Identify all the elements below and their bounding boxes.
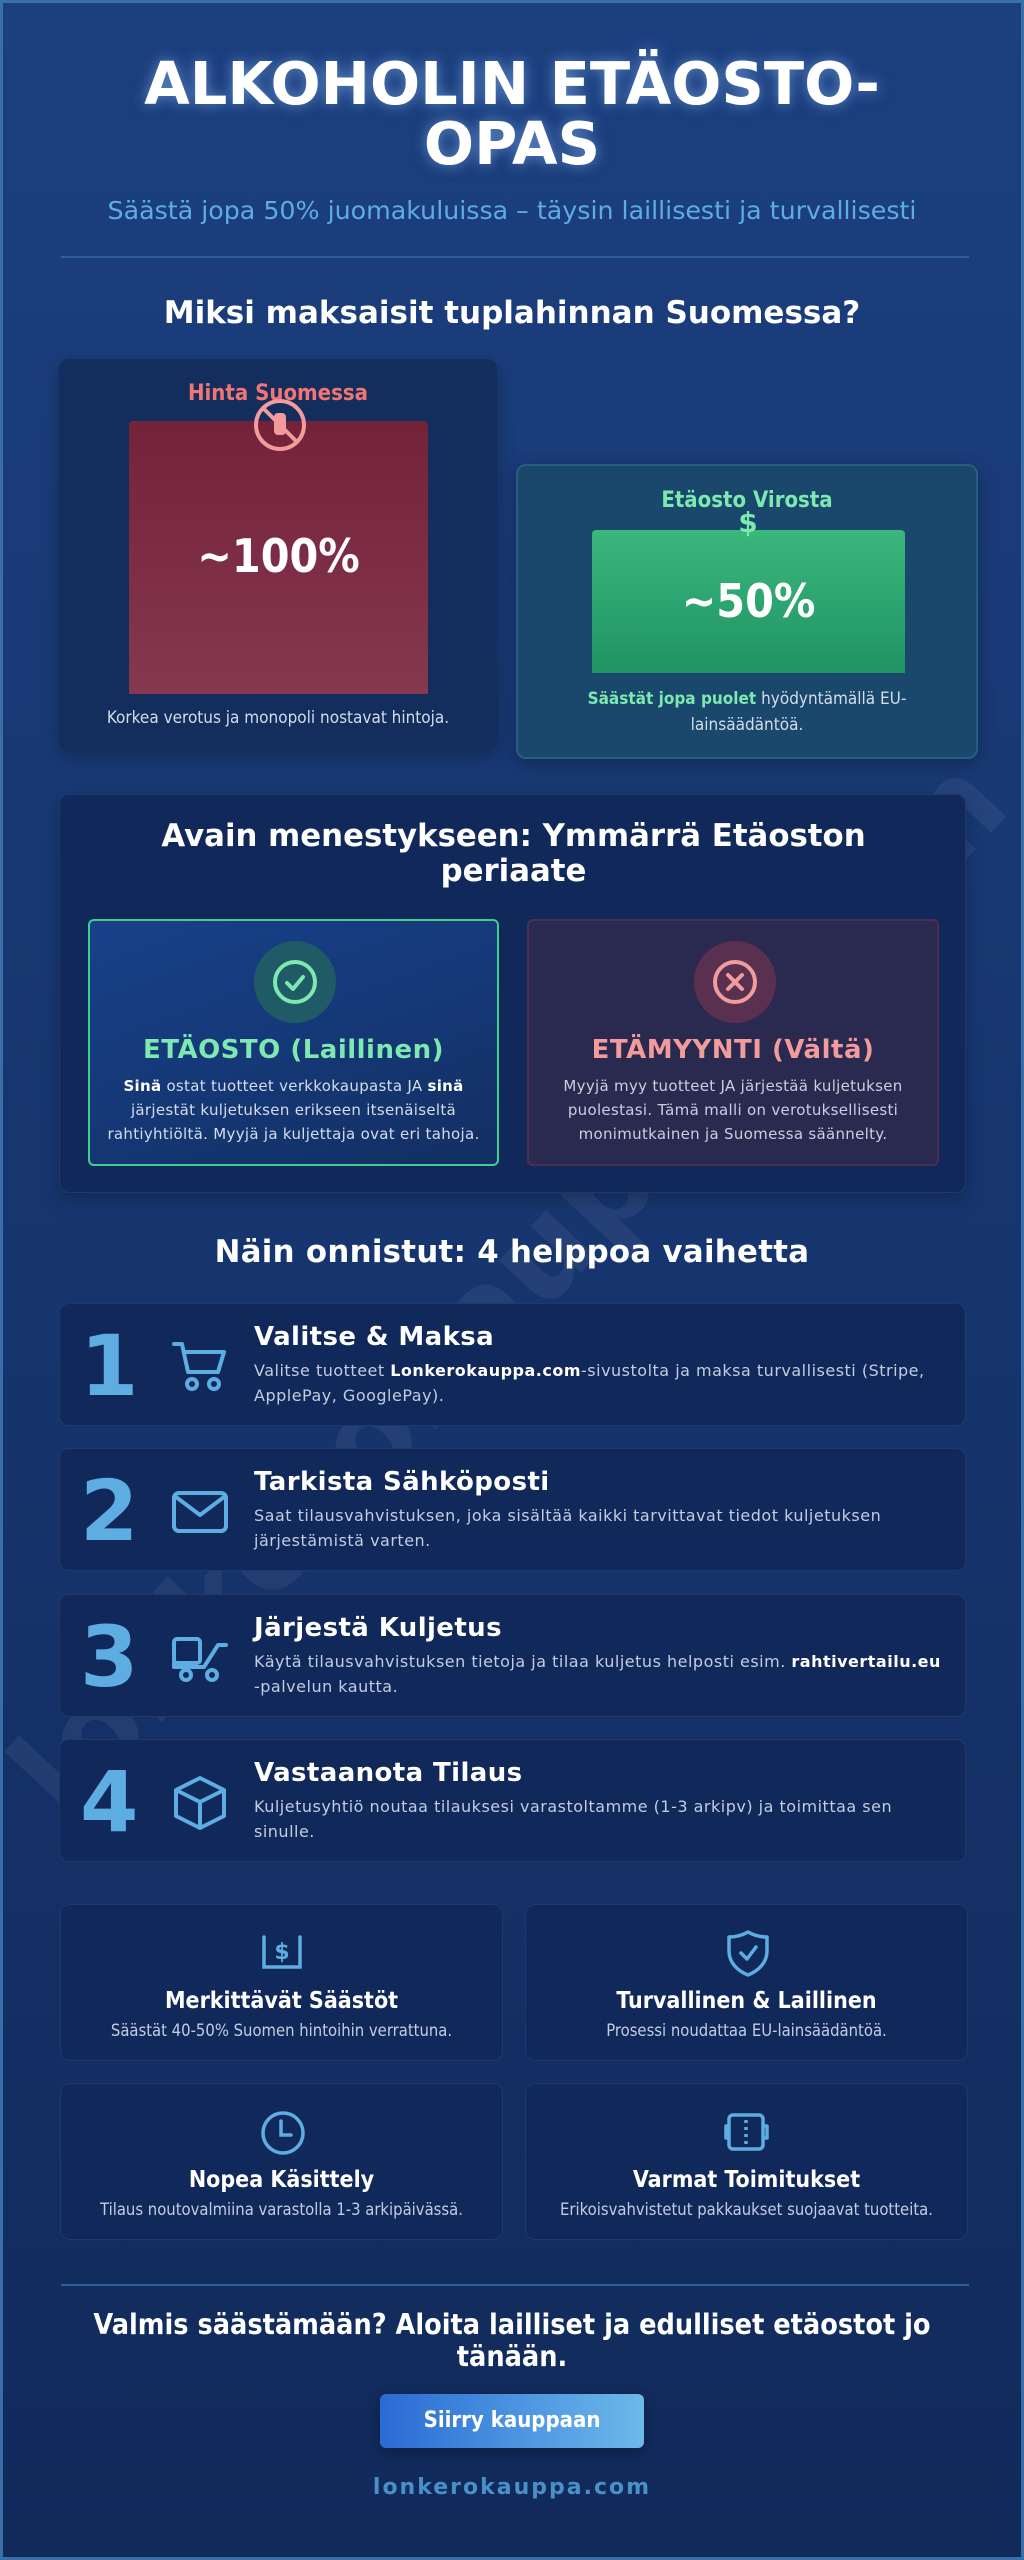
caption: Säästät jopa puolet hyödyntämällä EU-lainsäädäntöä. <box>588 689 906 735</box>
CTA heading: Valmis säästämään? Aloita lailliset ja edulliset etäostot jo tänään. <box>93 2308 931 2373</box>
title: OPAS <box>424 109 600 178</box>
icon: box <box>174 1776 226 1830</box>
feature: savings: Merkittävät Säästöt <box>165 1988 398 2014</box>
icon: check <box>254 941 336 1023</box>
subtitle: Säästä jopa 50% juomakuluissa – täysin laillisesti ja turvallisesti <box>108 196 916 225</box>
icon: money bag <box>262 1935 302 1969</box>
feature: safe legal: Prosessi noudattaa EU-lainsäädäntöä. <box>606 2021 887 2040</box>
heading: Avain menestykseen: Ymmärrä Etäoston <box>161 818 866 854</box>
feature: safe legal <box>525 1904 968 2061</box>
icon: shield <box>727 1930 769 1977</box>
bar: 100%: ~100% <box>197 529 360 583</box>
title: ALKOHOLIN ETÄOSTO- <box>144 49 880 118</box>
step 4: Vastaanota Tilaus <box>254 1758 523 1788</box>
icon: envelope <box>172 1491 228 1533</box>
feature: savings <box>60 1904 503 2061</box>
step 1: Valitse tuotteet Lonkerokauppa.com-sivustolta ja maksa turvallisesti (Stripe, ApplePay, GooglePay). <box>254 1361 925 1405</box>
label: Hinta Suomessa: Hinta Suomessa <box>188 381 368 406</box>
step 3: Järjestä Kuljetus <box>254 1613 502 1643</box>
button <box>380 2394 644 2448</box>
feature: reliable delivery <box>525 2083 968 2240</box>
heading: periaate <box>441 853 586 889</box>
title <box>140 44 881 178</box>
feature: reliable delivery: Erikoisvahvistetut pakkaukset suojaavat tuotteita. <box>560 2200 933 2219</box>
feature: fast <box>60 2083 503 2240</box>
icon: clock <box>261 2111 305 2155</box>
button: Siirry kauppaan <box>424 2408 600 2433</box>
heading: why pay double: Miksi maksaisit tuplahinnan Suomessa? <box>164 295 860 331</box>
bar: 50%: ~50% <box>682 574 815 628</box>
icon: dolly <box>172 1637 228 1682</box>
heading: 4 steps: Näin onnistut: 4 helppoa vaihetta <box>215 1234 809 1270</box>
feature: reliable delivery: Varmat Toimitukset <box>633 2167 860 2193</box>
box: remote sale avoid: ETÄMYYNTI (Vältä) <box>592 1035 874 1065</box>
icon: package <box>724 2113 769 2151</box>
step 1: Valitse & Maksa <box>254 1322 494 1352</box>
step 3: 3 <box>80 1608 138 1706</box>
icon: no bottle <box>254 399 306 451</box>
icon: cart <box>172 1342 226 1391</box>
step 3: -palvelun kautta. <box>254 1677 398 1696</box>
label: Etäosto Virosta: Etäosto Virosta <box>661 488 833 513</box>
icon: money bag: $ <box>274 1940 290 1965</box>
step 3 <box>59 1594 966 1717</box>
box: legal remote purchase: Sinä ostat tuotteet verkkokaupasta JA sinä järjestät kuljetuksen erikseen itsenäiseltä rahtiyhtiöltä. Myyjä ja kuljettaja ovat eri tahoja. <box>107 1077 480 1143</box>
box: legal remote purchase: ETÄOSTO (Laillinen) <box>143 1035 444 1065</box>
panel: key principle <box>59 794 966 1193</box>
step 2 <box>59 1448 966 1571</box>
step 4: Kuljetusyhtiö noutaa tilauksesi varastoltamme (1-3 arkipv) ja toimittaa sen sinulle. <box>254 1797 892 1841</box>
step 2: Tarkista Sähköposti <box>254 1467 550 1497</box>
step 1: 1 <box>80 1317 138 1415</box>
step 3: Käytä tilausvahvistuksen tietoja ja tilaa kuljetus helposti esim. rahtivertailu.eu <box>254 1652 941 1671</box>
box: remote sale avoid <box>527 919 939 1166</box>
feature: safe legal: Turvallinen & Laillinen <box>616 1988 877 2014</box>
footer url: lonkerokauppa.com <box>373 2475 651 2500</box>
feature: fast: Tilaus noutovalmiina varastolla 1-3 arkipäivässä. <box>100 2200 463 2219</box>
feature: savings: Säästät 40-50% Suomen hintoihin verrattuna. <box>111 2021 452 2040</box>
icon: cross <box>694 941 776 1023</box>
step 2: Saat tilausvahvistuksen, joka sisältää kaikki tarvittavat tiedot kuljetuksen järjestämistä varten. <box>254 1506 881 1550</box>
feature: fast: Nopea Käsittely <box>189 2167 374 2193</box>
step 4 <box>59 1739 966 1862</box>
box: remote sale avoid: Myyjä myy tuotteet JA järjestää kuljetuksen puolestasi. Tämä malli on verotuksellisesti monimutkainen ja Suomessa säännelty. <box>563 1077 903 1143</box>
bar: 50% <box>592 530 905 673</box>
box: legal remote purchase <box>88 919 499 1166</box>
step 1 <box>59 1303 966 1426</box>
heading <box>161 818 866 889</box>
panel: price in Finland <box>59 359 497 751</box>
bar: 100% <box>129 421 428 694</box>
icon: coin: $ <box>738 506 758 539</box>
panel: remote purchase from Estonia <box>516 464 978 759</box>
watermark: lonkerokauppa.com <box>0 731 1024 1844</box>
step 2: 2 <box>80 1462 138 1560</box>
caption: Korkea verotus ja monopoli nostavat hintoja. <box>107 708 449 728</box>
step 4: 4 <box>80 1753 138 1851</box>
